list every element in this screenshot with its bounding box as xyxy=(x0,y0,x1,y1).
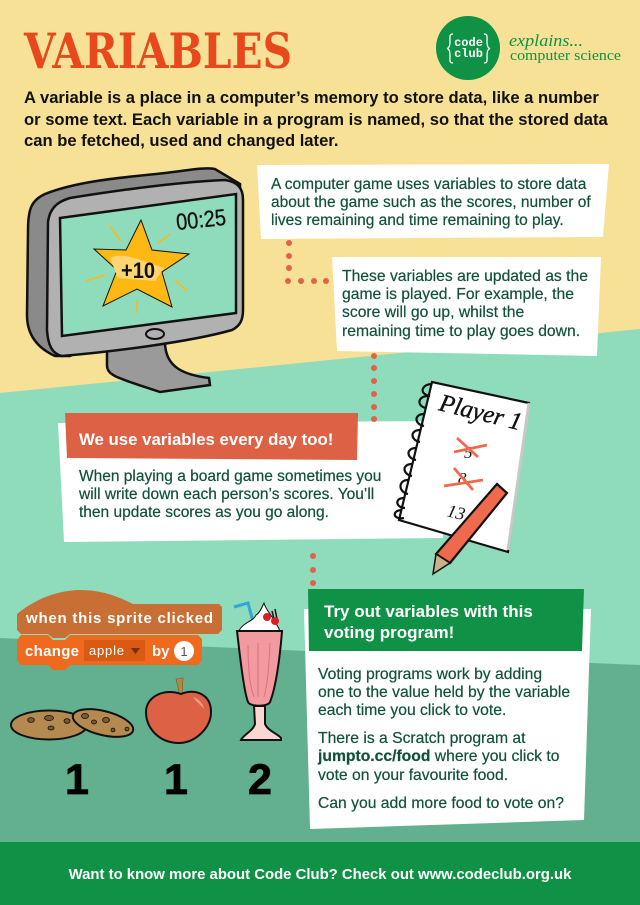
panel: variables updated text: game is played. For example, the xyxy=(342,286,574,303)
panel: every day: then update scores as you go along. xyxy=(79,504,329,521)
scratch blocks: 1 xyxy=(180,644,188,659)
panel: every day: will write down each person’s scores. You’ll xyxy=(79,486,374,503)
logo: code club: computer science xyxy=(510,48,621,64)
icon: computer monitor: +10 xyxy=(121,258,155,283)
icon: notebook and pencil: 13 xyxy=(445,500,467,524)
scratch blocks xyxy=(17,590,222,670)
panel: voting: There is a Scratch program at xyxy=(318,730,526,747)
panel: voting: Can you add more food to vote on? xyxy=(318,795,564,812)
scratch blocks: when this sprite clicked xyxy=(25,610,213,627)
logo: code club: explains... xyxy=(509,31,583,50)
panel: variables updated text: remaining time to play goes down. xyxy=(342,323,580,340)
icon: milkshake xyxy=(234,601,284,741)
panel: voting: one to the value held by the variable xyxy=(318,684,570,701)
icon: computer monitor xyxy=(26,167,244,394)
scratch blocks: apple xyxy=(89,643,124,658)
heading: every day xyxy=(65,413,358,460)
heading: voting xyxy=(308,589,584,651)
panel: computer game text xyxy=(257,164,609,239)
numbers: vote counts: 2 xyxy=(248,756,272,804)
panel: every day xyxy=(58,421,444,542)
intro text xyxy=(24,88,608,150)
logo: code club: code xyxy=(454,36,483,50)
scratch blocks: by xyxy=(152,643,170,660)
panel: voting: vote on your favourite food. xyxy=(318,767,508,784)
panel: variables updated text xyxy=(332,257,601,356)
numbers: vote counts: 1 xyxy=(164,756,188,804)
panel: voting: jumpto.cc/food where you click to xyxy=(318,748,559,765)
heading: voting: voting program! xyxy=(324,623,454,642)
intro text: or some text. Each variable in a program is named, so that the stored data xyxy=(24,110,608,128)
icon: cookies xyxy=(10,708,134,740)
logo: code club: club xyxy=(454,47,483,61)
numbers: vote counts: 1 xyxy=(65,756,89,804)
icon: apple xyxy=(145,678,212,744)
numbers: vote counts xyxy=(65,756,272,804)
title: VARIABLES xyxy=(23,22,292,80)
logo: code club xyxy=(436,16,621,80)
panel: variables updated text: score will go up, whilst the xyxy=(342,304,524,321)
panel: variables updated text: These variables are updated as the xyxy=(342,268,588,285)
panel: computer game text: lives remaining and time remaining to play. xyxy=(271,212,564,229)
panel: voting: each time you click to vote. xyxy=(318,702,506,719)
panel: computer game text: about the game such as the scores, number of xyxy=(271,194,591,211)
heading: voting: Try out variables with this xyxy=(324,602,533,621)
icon: notebook and pencil: 8 xyxy=(458,469,467,488)
panel: computer game text: A computer game uses variables to store data xyxy=(271,176,586,193)
intro text: A variable is a place in a computer’s memory to store data, like a number xyxy=(24,88,599,107)
scratch blocks: change xyxy=(25,643,79,660)
icon: computer monitor: 00:25 xyxy=(175,204,227,235)
panel: every day: When playing a board game sometimes you xyxy=(79,468,381,485)
panel: voting: Voting programs work by adding xyxy=(318,666,542,682)
intro text: can be fetched, used and changed later. xyxy=(24,131,338,150)
icon: notebook and pencil: Player 1 xyxy=(436,389,525,436)
panel: voting xyxy=(304,609,591,829)
heading: every day: We use variables every day too! xyxy=(79,430,333,449)
icon: notebook and pencil: 5 xyxy=(464,443,472,462)
footer: Want to know more about Code Club? Check out www.codeclub.org.uk xyxy=(69,867,571,883)
footer xyxy=(0,842,640,905)
icon: notebook and pencil xyxy=(394,380,530,576)
